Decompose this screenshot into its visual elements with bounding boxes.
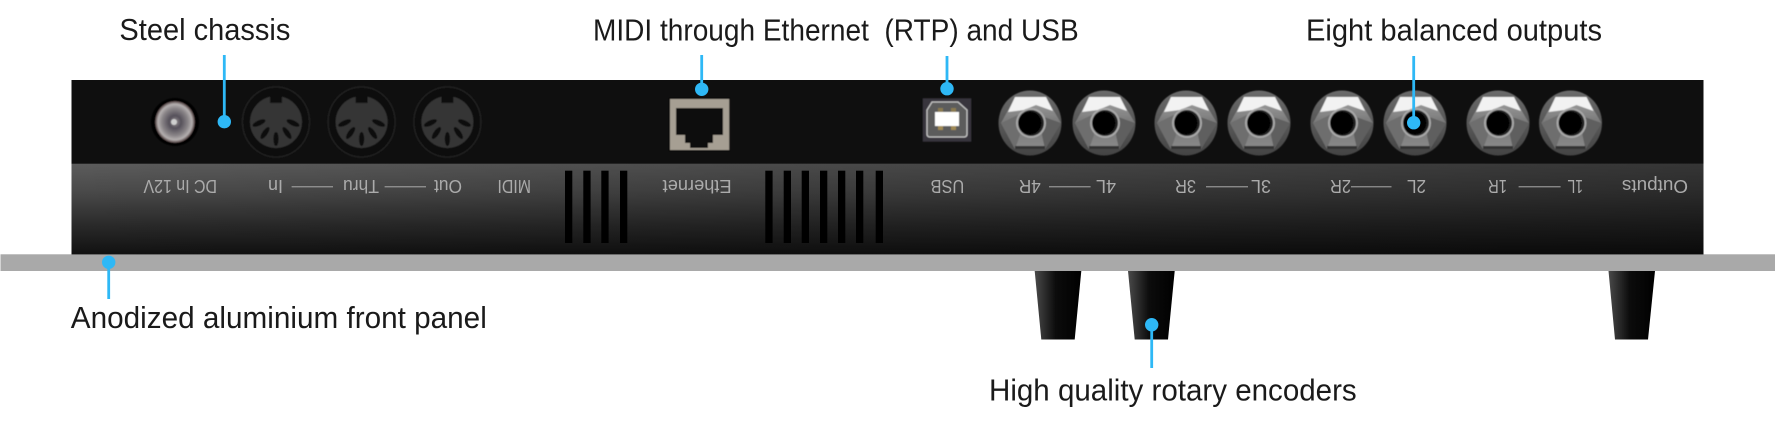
output jack 3L bbox=[1228, 90, 1290, 156]
upside-down port labels: 1L bbox=[1568, 176, 1583, 196]
output jack 2L bbox=[1384, 90, 1446, 156]
output jack 4R bbox=[998, 90, 1062, 156]
upside-down port labels: USB bbox=[931, 176, 964, 196]
left vent slots bbox=[565, 171, 627, 243]
callout: anodized aluminium front panel: Anodized aluminium front panel bbox=[71, 300, 487, 335]
output jack 4L bbox=[1072, 90, 1136, 156]
rotary knob 3 bbox=[1608, 271, 1655, 340]
upside-down port labels: 2R bbox=[1330, 176, 1351, 196]
callout: high quality rotary encoders bbox=[989, 318, 1357, 408]
upside-down port labels: 1R bbox=[1488, 176, 1507, 196]
upside-down port labels: 3L bbox=[1251, 176, 1271, 196]
rotary knob 1 bbox=[1035, 271, 1081, 340]
upside-down port labels: 4R bbox=[1019, 176, 1041, 196]
output jack 3R bbox=[1154, 90, 1218, 156]
MIDI in port bbox=[242, 87, 310, 157]
MIDI out port bbox=[414, 87, 481, 157]
upside-down port labels: DC In 12V bbox=[144, 176, 217, 196]
callout: MIDI through Ethernet and USB bbox=[593, 12, 1079, 96]
output jack 1L bbox=[1539, 90, 1602, 156]
callout: eight balanced outputs: Eight balanced outputs bbox=[1306, 12, 1602, 48]
callout: MIDI through Ethernet and USB: MIDI through Ethernet (RTP) and USB bbox=[593, 12, 1079, 48]
steel chassis bbox=[72, 80, 1704, 254]
output jack 2R bbox=[1310, 90, 1374, 156]
upside-down port labels: Outputs bbox=[1622, 176, 1688, 196]
Ethernet port bbox=[669, 98, 730, 151]
upside-down port labels: Out bbox=[434, 176, 462, 196]
callout: steel chassis bbox=[119, 12, 290, 128]
right vent slots bbox=[765, 171, 883, 243]
upside-down port labels bbox=[144, 176, 1688, 196]
upside-down port labels: Thru bbox=[343, 176, 379, 196]
upside-down port labels: 4L bbox=[1096, 176, 1116, 196]
rotary knob 2 bbox=[1128, 271, 1175, 340]
upside-down port labels: 2L bbox=[1407, 176, 1426, 196]
USB port bbox=[923, 98, 971, 142]
front panel bar bbox=[0, 254, 1775, 271]
callout: eight balanced outputs bbox=[1306, 12, 1602, 129]
MIDI thru port bbox=[328, 87, 395, 157]
upside-down port labels: 3R bbox=[1175, 176, 1196, 196]
callout: steel chassis: Steel chassis bbox=[119, 12, 290, 47]
callout: high quality rotary encoders: High quality rotary encoders bbox=[989, 372, 1357, 408]
output jack 1R bbox=[1466, 90, 1530, 156]
callout: anodized aluminium front panel bbox=[71, 256, 487, 335]
upside-down port labels: In bbox=[268, 176, 283, 196]
DC power jack bbox=[151, 98, 199, 146]
upside-down port labels: Ethernet bbox=[663, 176, 732, 196]
upside-down port labels: MIDI bbox=[498, 176, 531, 196]
